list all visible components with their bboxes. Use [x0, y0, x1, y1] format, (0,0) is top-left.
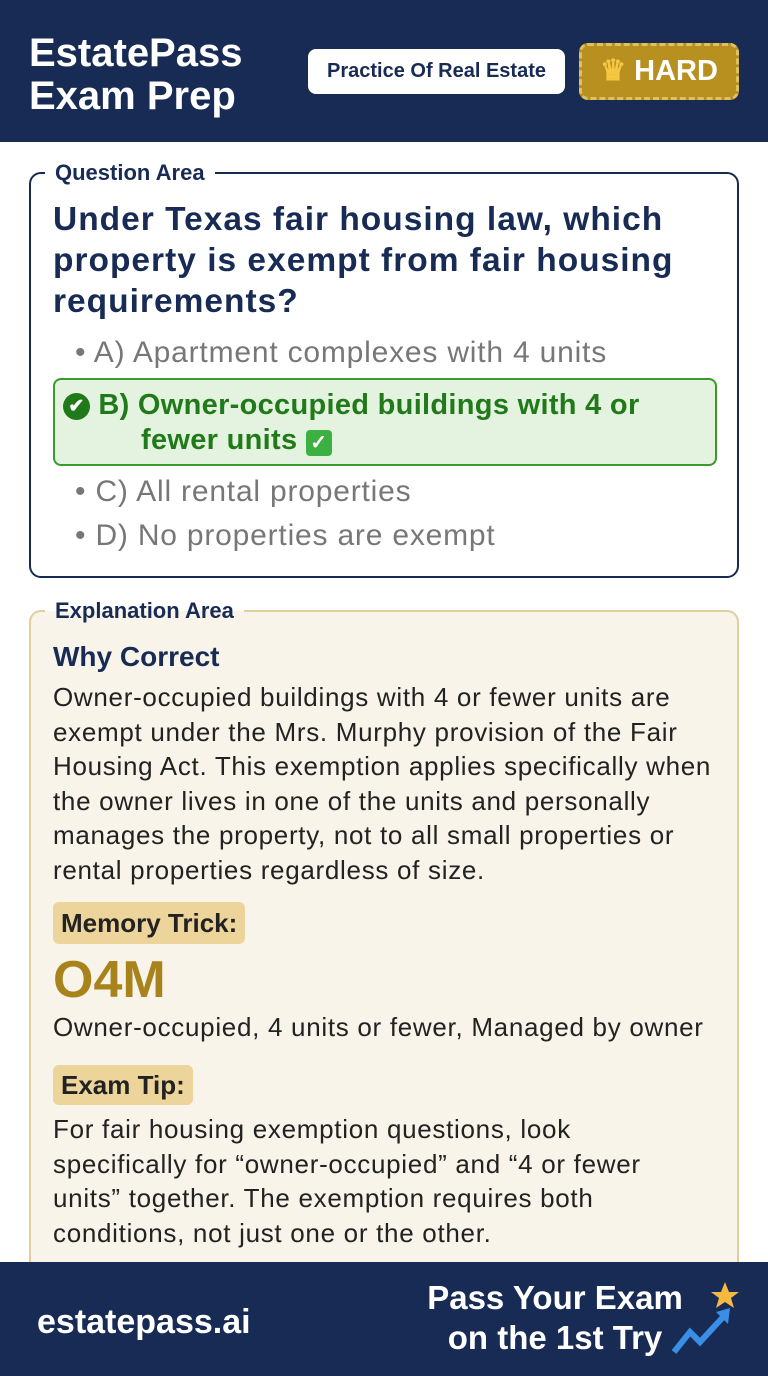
- exam tip label: [53, 1065, 193, 1105]
- category pill: Practice Of Real Estate: [327, 60, 546, 82]
- explanation text: exempt under the Mrs. Murphy provision of the Fair: [53, 716, 678, 746]
- slogan: [427, 1279, 683, 1356]
- title: Exam Prep: [29, 74, 236, 118]
- option B correct: ✓: [310, 432, 327, 454]
- slogan: Pass Your Exam: [427, 1279, 683, 1316]
- explanation text: rental properties regardless of size.: [53, 854, 485, 884]
- memory trick label: [53, 902, 245, 944]
- panel: explanation: [29, 610, 739, 1310]
- footer: [0, 1262, 768, 1376]
- icon: star and arrow: [672, 1282, 739, 1354]
- explanation text: manages the property, not to all small properties or: [53, 820, 674, 850]
- difficulty badge: ♛ HARD: [600, 55, 718, 87]
- option B correct: ✔: [68, 396, 85, 417]
- option D: • D) No properties are exempt: [75, 519, 496, 552]
- panel: question: [29, 172, 739, 578]
- option C: • C) All rental properties: [75, 475, 411, 508]
- exam tip text: units” together. The exemption requires both: [53, 1183, 594, 1213]
- category pill: [308, 49, 565, 94]
- difficulty badge: [579, 43, 739, 100]
- option A: • A) Apartment complexes with 4 units: [75, 336, 607, 369]
- slogan: on the 1st Try: [448, 1319, 662, 1356]
- question text: Under Texas fair housing law, which: [53, 201, 663, 238]
- exam tip text: conditions, not just one or the other.: [53, 1218, 492, 1248]
- option B correct: [53, 378, 717, 466]
- heading: explanation area: Explanation Area: [55, 598, 234, 623]
- exam tip label: Exam Tip:: [61, 1070, 185, 1100]
- header: [0, 0, 768, 142]
- mnemonic meaning: Owner-occupied, 4 units or fewer, Managed by owner: [53, 1012, 704, 1042]
- exam tip text: For fair housing exemption questions, look: [53, 1114, 571, 1144]
- website: estatepass.ai: [37, 1303, 251, 1341]
- explanation text: Housing Act. This exemption applies specifically when: [53, 751, 711, 781]
- title: [29, 31, 242, 118]
- memory trick label: Memory Trick:: [61, 908, 237, 938]
- explanation text: [53, 682, 711, 884]
- exam tip text: [53, 1114, 641, 1248]
- why correct heading: Why Correct: [53, 641, 219, 672]
- option B correct: fewer units: [141, 424, 297, 456]
- option B correct: B) Owner-occupied buildings with 4 or: [98, 389, 640, 421]
- mnemonic: O4M: [53, 951, 166, 1009]
- explanation text: Owner-occupied buildings with 4 or fewer units are: [53, 682, 670, 712]
- question text: [53, 201, 673, 320]
- question text: property is exempt from fair housing: [53, 242, 673, 279]
- explanation text: the owner lives in one of the units and personally: [53, 786, 650, 816]
- exam tip text: specifically for “owner-occupied” and “4 or fewer: [53, 1148, 641, 1178]
- title: EstatePass: [29, 31, 242, 75]
- heading: question area: Question Area: [55, 160, 205, 185]
- question text: requirements?: [53, 283, 299, 320]
